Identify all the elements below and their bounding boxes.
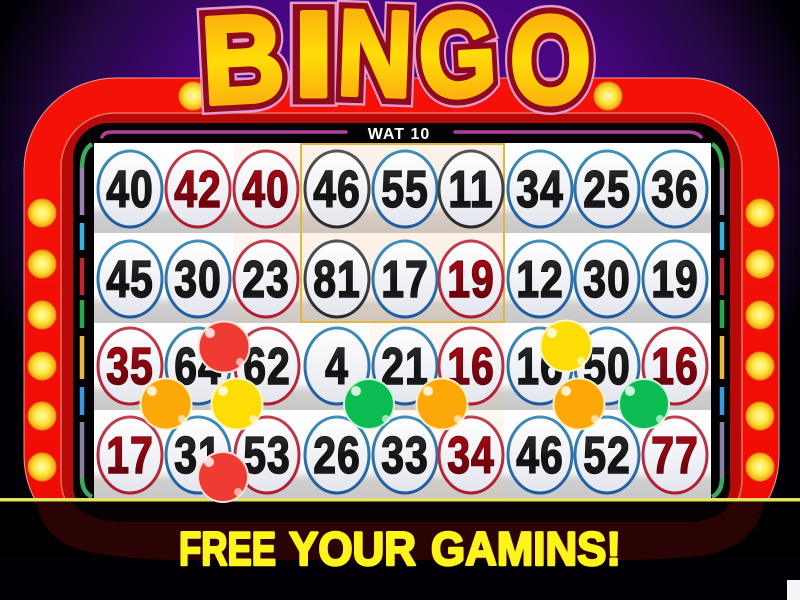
row 3 (98, 328, 707, 404)
row 2: 45 (106, 250, 154, 308)
top magenta strip right (455, 132, 701, 137)
row 4: 31 (174, 426, 222, 484)
daubing marker: orange 3 (554, 378, 604, 430)
row 3: 16 (516, 337, 564, 395)
row 3: 35 (106, 337, 154, 395)
row 4: 77 (651, 426, 699, 484)
slogan (179, 522, 621, 575)
bingo board background (94, 143, 711, 498)
row 2 (98, 241, 707, 317)
row 4: 26 (313, 426, 361, 484)
row 4: 17 (106, 426, 154, 484)
red marquee frame (24, 78, 779, 548)
BINGO title (198, 0, 591, 131)
row 1: 36 (651, 160, 699, 218)
row 4: 34 (447, 426, 495, 484)
bottom bar (0, 498, 800, 572)
row 3: 16 (447, 337, 495, 395)
daubing marker: orange 2 (416, 378, 468, 430)
row 1: 40 (106, 160, 154, 218)
strip label: WAT 10 (368, 126, 430, 143)
top magenta strip left (102, 132, 346, 137)
row 3: 16 (651, 337, 699, 395)
slogan: FREE (179, 522, 276, 575)
row 1: 46 (313, 160, 361, 218)
row 2: 81 (313, 250, 361, 308)
daubing marker: red 2 (198, 452, 248, 502)
daubing marker: yellow 2 (540, 320, 592, 372)
row 3: 62 (243, 337, 291, 395)
left LED strip (82, 144, 92, 497)
row 2: 17 (381, 250, 429, 308)
row 1: 25 (583, 160, 631, 218)
row 1: 42 (174, 160, 222, 218)
daubing marker: orange 1 (140, 378, 192, 430)
row 2: 19 (447, 250, 495, 308)
row 3: 50 (583, 337, 631, 395)
number balls (98, 151, 707, 493)
daubing marker: yellow 1 (212, 378, 262, 430)
right LED strip (712, 144, 722, 497)
row 4: 46 (516, 426, 564, 484)
row 2: 12 (516, 250, 564, 308)
row 4: 53 (243, 426, 291, 484)
row 1: 11 (448, 160, 494, 218)
daubing marker: green 2 (619, 379, 669, 429)
row 4 (98, 417, 707, 493)
row 1: 40 (242, 160, 290, 218)
lamps (28, 82, 774, 481)
row 2: 23 (242, 250, 290, 308)
row 3: 64 (174, 337, 222, 395)
row 3: 4 (325, 337, 349, 395)
row 4: 52 (583, 426, 631, 484)
row 1: 55 (381, 160, 429, 218)
row 1 (98, 151, 707, 227)
row 2: 30 (174, 250, 222, 308)
watermark corner (787, 580, 800, 600)
row 2: 19 (651, 250, 699, 308)
slogan: GAMINS! (431, 522, 621, 575)
daubing marker: green 1 (344, 379, 394, 429)
daubing marker: red 1 (198, 322, 250, 372)
row 1: 34 (516, 160, 564, 218)
row 3: 21 (381, 337, 429, 395)
row 4: 33 (381, 426, 429, 484)
slogan: YOUR (289, 522, 416, 575)
row 2: 30 (583, 250, 631, 308)
